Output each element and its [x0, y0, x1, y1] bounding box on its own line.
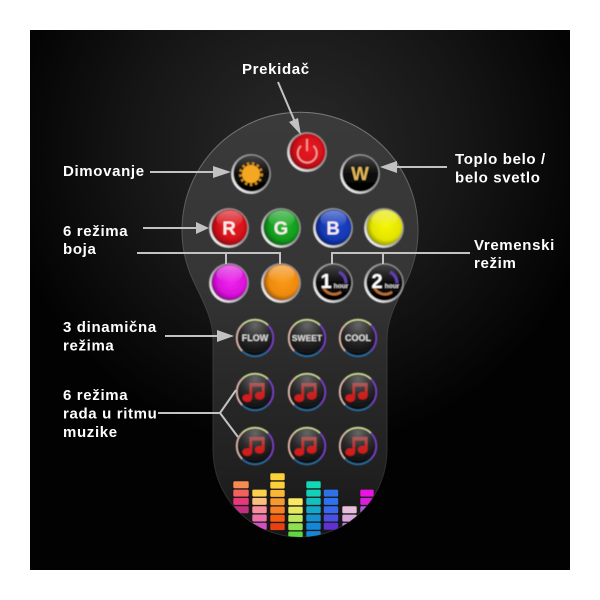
- label: dimming: Dimovanje: [63, 163, 145, 180]
- arrow: dynamic modes: [165, 330, 234, 342]
- button: FLOW: FLOW: [242, 333, 269, 343]
- label: dynamic modes: 3 dinamična: [63, 319, 157, 336]
- connector: colour modes bracket: [137, 253, 280, 264]
- button: music 6: [340, 428, 376, 464]
- label: warm white: Toplo belo /: [455, 151, 546, 168]
- button: G: G: [274, 218, 288, 238]
- arrow: warm white: [380, 161, 447, 173]
- button: orange: [261, 263, 301, 303]
- label: music modes: muzike: [63, 424, 118, 441]
- button: R: R: [222, 218, 236, 238]
- button: power: [287, 132, 327, 172]
- label: timer mode: Vremenski: [474, 237, 555, 254]
- button: magenta: [209, 263, 249, 303]
- button: SWEET: SWEET: [292, 333, 323, 343]
- label: colour modes: 6 režima: [63, 223, 128, 240]
- button: dimmer sun: [231, 154, 271, 194]
- label: music modes: rada u ritmu: [63, 406, 157, 422]
- button: music 3: [340, 374, 376, 410]
- button: warm white W: [340, 154, 380, 194]
- arrow: power: [278, 82, 301, 135]
- button: music 4: [236, 428, 274, 464]
- button: B: B: [326, 218, 340, 238]
- button: G: [261, 208, 301, 248]
- button: music 2: [288, 374, 326, 410]
- button: SWEET: [288, 320, 326, 356]
- button: 1 hour timer: [313, 263, 353, 303]
- button: 2 hour timer: [364, 263, 404, 303]
- label: dynamic modes: režima: [63, 338, 114, 354]
- label: music modes: 6 režima: [63, 387, 128, 404]
- button: R: [209, 208, 249, 248]
- button: COOL: COOL: [345, 333, 372, 343]
- arrow: colour modes: [143, 222, 209, 234]
- arrow: dimmer: [150, 166, 231, 178]
- button: music 5: [288, 428, 326, 464]
- equalizer graphic: [233, 473, 374, 539]
- connector: timer bracket: [332, 253, 470, 264]
- label: warm white: belo svetlo: [455, 170, 541, 186]
- label: colour modes: boja: [63, 241, 96, 258]
- button: 2 hour timer: hour: [385, 283, 400, 290]
- button: yellow: [364, 208, 404, 248]
- button: B: [313, 208, 353, 248]
- button: 1 hour timer: 1: [320, 271, 332, 293]
- label: power switch: Prekidač: [242, 61, 310, 78]
- connector: music modes: [158, 390, 238, 437]
- button: 1 hour timer: hour: [334, 283, 349, 290]
- button: COOL: [340, 320, 376, 356]
- button: music 1: [236, 374, 274, 410]
- button: 2 hour timer: 2: [371, 271, 383, 293]
- button: FLOW: [236, 320, 274, 356]
- label: timer mode: režim: [474, 255, 516, 272]
- remote control body: [182, 112, 418, 537]
- button grid: [209, 132, 404, 464]
- button: warm white W: W: [351, 163, 369, 184]
